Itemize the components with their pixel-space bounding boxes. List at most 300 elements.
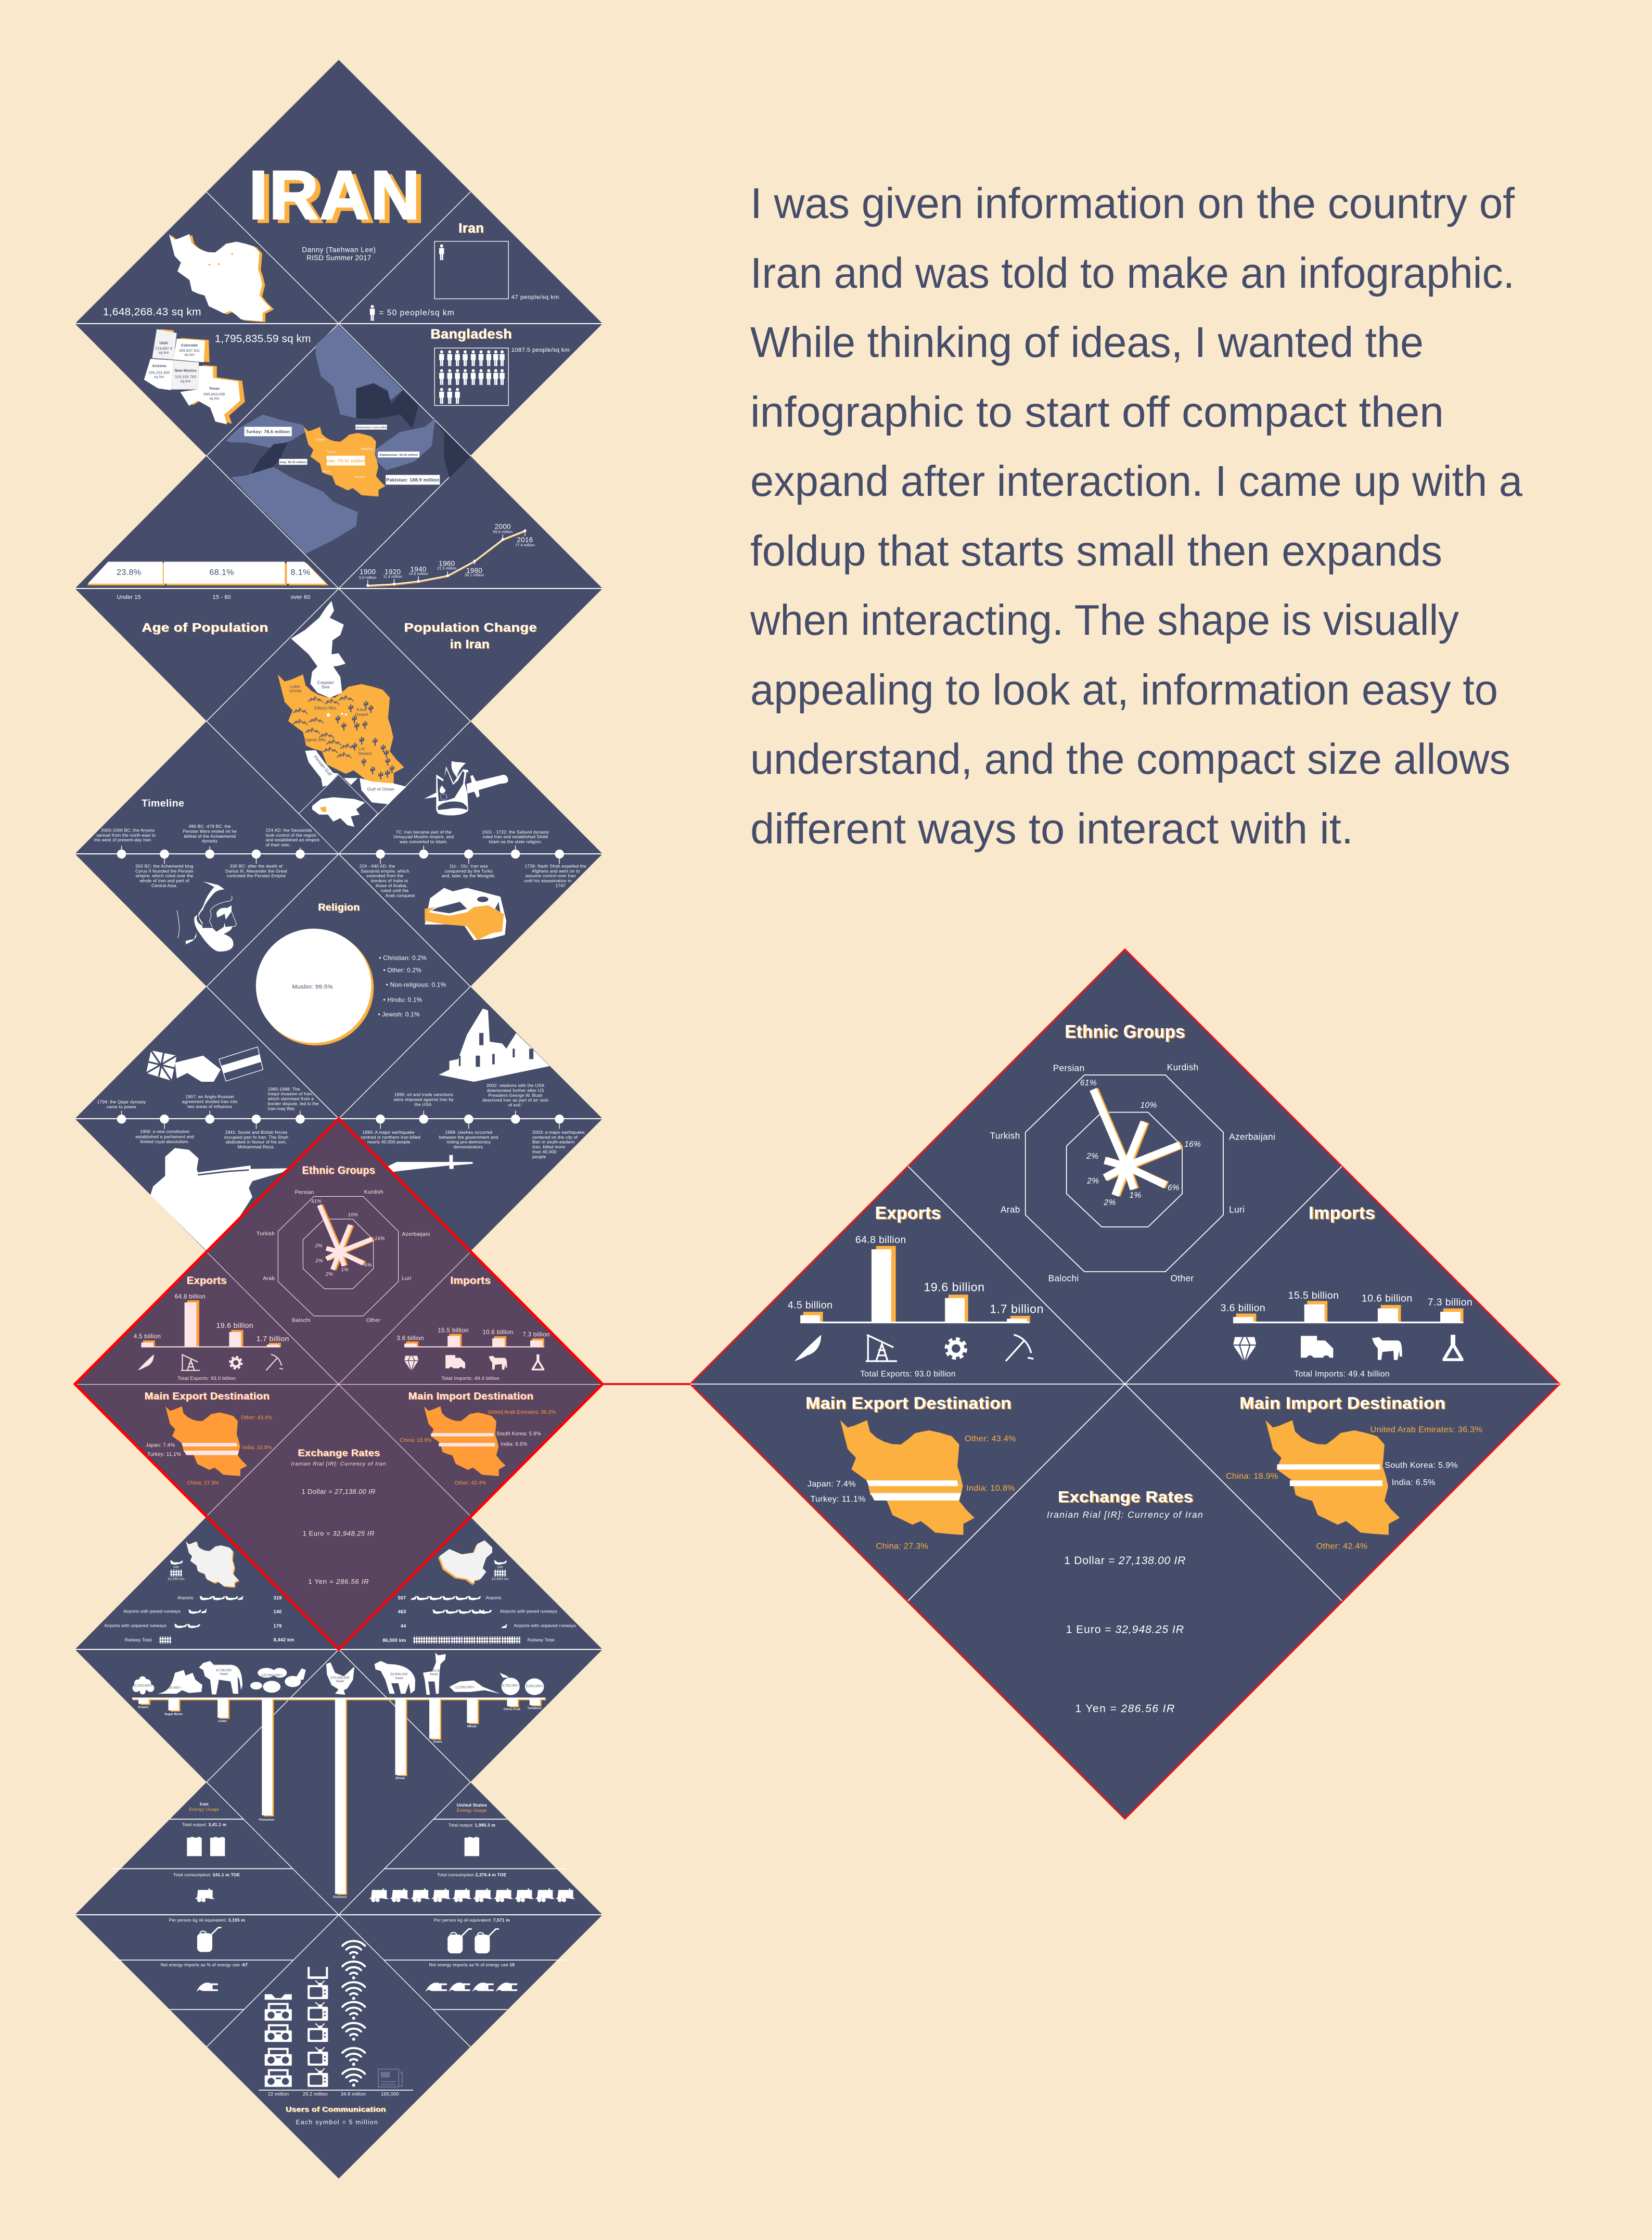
Iran energy usage: Net energy imports as % of energy use -67 xyxy=(161,1962,248,1967)
table: China airports and railways: 507 xyxy=(398,1595,406,1601)
table: China airports and railways: Airports with paved runways xyxy=(500,1609,557,1614)
chart: ethnic groups radar: Other xyxy=(366,1318,381,1324)
timeline text part one: conquered by the Turks xyxy=(445,868,493,874)
timeline text part two: centered on the city of xyxy=(532,1134,578,1140)
map: Iran infrastructure xyxy=(186,1541,240,1588)
timeline text part one: Persian Wars ended int he xyxy=(183,829,237,834)
map: export destinations enlarged: China: 27.3% xyxy=(876,1541,928,1551)
timeline text part one: Arab conquest xyxy=(386,893,415,898)
text block: project description: appealing to look at, information easy to xyxy=(750,665,1498,714)
chart: agriculture bars: Sugar Beets xyxy=(164,1713,183,1716)
chart: population change line: 1920 xyxy=(385,568,401,576)
map: export destinations enlarged: Other: 43.4% xyxy=(965,1434,1016,1443)
table: Iran airports and railways: Railway Total xyxy=(125,1637,152,1643)
heading: Main Export Destination: Main Export Destination xyxy=(145,1390,270,1402)
chart: ethnic groups radar enlarged: Luri xyxy=(1229,1205,1245,1214)
chart: exports bars enlarged: 1.7 billion xyxy=(990,1302,1044,1315)
timeline text part one: Islam as the state religion. xyxy=(489,839,542,844)
map: export destinations: Turkey: 11.1% xyxy=(147,1452,181,1457)
timeline text part one: 330 BC: after the death of xyxy=(230,864,283,868)
labels: crop and livestock volumes: 3,000,000 t xyxy=(526,1684,543,1688)
chart: ethnic groups radar: Luri xyxy=(402,1276,412,1282)
timeline text part two: Iran, killed more xyxy=(532,1144,565,1149)
heading: Ethnic Groups: Ethnic Groups xyxy=(302,1164,375,1176)
table: China airports and railways: Airports with unpaved runways xyxy=(514,1623,576,1628)
United States energy usage xyxy=(369,1802,575,1992)
map: US states comparison: sq km xyxy=(159,351,169,355)
icons: export categories xyxy=(138,1354,283,1371)
timeline text part two: Ban in south-eastern xyxy=(532,1140,575,1145)
foldup infographic: full strip xyxy=(75,60,603,2179)
map: Iran geography: Zagros Mts. xyxy=(303,737,327,742)
chart: religion pie xyxy=(256,929,374,1045)
timeline text part two: of evil.' xyxy=(508,1103,523,1108)
chart: ethnic groups radar: 6% xyxy=(364,1262,372,1268)
map: export destinations: Japan: 7.4% xyxy=(146,1443,175,1448)
timeline text part two: the USA. xyxy=(415,1102,433,1107)
map: Iran geography: Gulf of Oman xyxy=(367,786,394,791)
timeline text part one: 1501 - 1722: the Safavid dynasty xyxy=(482,829,549,835)
table: Iran airports and railways xyxy=(104,1595,294,1644)
labels: crop and livestock volumes: head xyxy=(220,1672,228,1676)
map: Iran and neighbours: Ardebil xyxy=(316,438,325,441)
map: import destinations: Other: 42.4% xyxy=(455,1480,486,1486)
labels: crop and livestock volumes: 3,732,000 t xyxy=(502,1684,519,1688)
heading: Ethnic Groups enlarged: Ethnic Groups xyxy=(1065,1021,1185,1042)
table: Iran airports and railways: 179 xyxy=(274,1623,281,1629)
table: China airports and railways: Railway Total xyxy=(528,1637,554,1643)
title: IRAN: IRAN xyxy=(254,160,426,237)
labels: crop and livestock volumes: 25,200,000 xyxy=(425,1669,443,1673)
exchange rates list: 1 Dollar = 27,138.00 IR xyxy=(302,1488,376,1495)
map: US states comparison: 315,193.783 xyxy=(175,375,196,379)
text block: project description: Iran and was told to make an infographic. xyxy=(750,249,1515,297)
table: Iran airports and railways: 140 xyxy=(274,1609,281,1614)
labels: crop and livestock volumes: head xyxy=(336,1680,344,1683)
heading: Main Import Destination: Main Import Destination xyxy=(408,1390,533,1402)
timeline text part one: the west of present-day Iran xyxy=(94,837,151,842)
map: import destinations: South Korea: 5.9% xyxy=(496,1431,541,1437)
chart: population change line: 1980 xyxy=(466,567,482,574)
chart: exports bars: 64.8 billion xyxy=(175,1294,206,1300)
map: import destinations enlarged xyxy=(1226,1420,1482,1551)
map: US states comparison: sq km xyxy=(154,375,164,379)
Iran energy usage: Total consumption: 241.1 m TOE xyxy=(173,1872,240,1877)
chart: population change line: 1900 xyxy=(360,568,376,576)
timeline text part two: were imposed against Iran by xyxy=(393,1097,454,1102)
icons: import categories xyxy=(404,1354,544,1371)
panel: energy usage and communication xyxy=(111,1801,575,2126)
map: import destinations enlarged: United Arab Emirates: 36.3% xyxy=(1370,1425,1482,1435)
timeline text part one: controled the Persian Empire xyxy=(227,873,286,878)
timeline text part two: 1941: Soviet and British forces xyxy=(225,1130,287,1135)
text block: project description: understand, and the compact size allows xyxy=(750,735,1510,783)
chart: ethnic groups radar enlarged xyxy=(990,1062,1275,1284)
map: Iran geography: Persian Gulf xyxy=(313,754,333,777)
table: Iran airports and railways: Airports xyxy=(177,1595,193,1601)
map: import destinations enlarged: Other: 42.4% xyxy=(1316,1541,1367,1551)
timeline text part one: and established an empire xyxy=(266,837,319,842)
map: export destinations: China: 27.3% xyxy=(187,1480,219,1486)
heading: Exchange Rates enlarged: Exchange Rates xyxy=(1058,1488,1193,1506)
timeline text part one: 224 - 640 AD: the xyxy=(360,864,395,868)
timeline text part two: 1980-1988: The xyxy=(268,1086,300,1092)
heading: Population Change in Iran: Population Change xyxy=(404,621,537,635)
timeline text part two: two areas of influence xyxy=(187,1104,232,1109)
chart: population change line: 77.4 million xyxy=(515,544,535,547)
heading: Imports: Imports xyxy=(450,1275,491,1287)
heading: Religion: Religion xyxy=(318,902,360,913)
note: symbol scale: Each symbol = 5 million xyxy=(296,2119,378,2126)
map: Iran geography xyxy=(278,601,406,804)
legend: person symbol xyxy=(370,305,454,321)
note: total exports enlarged: Total Exports: 93.0 billion xyxy=(860,1370,956,1379)
map: China infrastructure xyxy=(438,1540,492,1585)
chart: agriculture bars: Cattle xyxy=(218,1720,227,1723)
chart: agriculture bars: Wheat xyxy=(467,1725,477,1728)
timeline text part one: ruled until the xyxy=(381,888,409,893)
table: China airports and railways: 86,000 km xyxy=(382,1637,406,1643)
highlighted diamond: exports and imports section xyxy=(74,1119,603,1649)
timeline text part two: limited royal absolutism. xyxy=(140,1139,189,1144)
legend: Iran plane and rail units: 100 xyxy=(173,1566,179,1569)
title: IRAN: IRAN xyxy=(249,157,421,234)
timeline text part two: occupied part fo Iran. The Shah xyxy=(224,1134,288,1140)
chart: ethnic groups radar: 2% xyxy=(315,1243,323,1248)
density box: Bangladesh xyxy=(434,348,508,405)
heading: Users of Communication: Users of Communication xyxy=(286,2105,386,2113)
Iran energy usage: Total output: 3,41.1 m xyxy=(182,1822,226,1827)
chart: communication pictograms: 22 million xyxy=(268,2092,289,2097)
map: US states comparison: Texas xyxy=(209,387,220,391)
chart: ethnic groups radar enlarged: Persian xyxy=(1053,1063,1085,1073)
timeline text part one: Sassanid empire, which xyxy=(361,868,409,874)
table: China airports and railways: Airports xyxy=(485,1595,502,1601)
timeline text part one: 224 AD: the Sassanids xyxy=(266,828,312,833)
exchange rates list: 1 Euro = 32,948.25 IR xyxy=(303,1529,375,1537)
map: export destinations enlarged xyxy=(808,1420,1016,1551)
list: other religions: • Other: 0.2% xyxy=(383,967,421,974)
timeline text part one: Afghans and went on to xyxy=(532,868,580,874)
heading: Bangladesh: Bangladesh xyxy=(430,327,512,342)
labels: crop and livestock volumes: 12,500,000 t xyxy=(455,1685,475,1689)
chart: agriculture bars: Grapes xyxy=(138,1706,149,1709)
chart: exports bars: 19.6 billion xyxy=(216,1321,253,1329)
timeline text part two: President George W. Bush xyxy=(489,1093,543,1098)
map: Iran and neighbours: Kerman xyxy=(354,476,365,479)
chart: age of population bar xyxy=(87,562,329,585)
label: Iran area: 1,648,268.43 sq km xyxy=(103,306,201,318)
chart: ethnic groups radar enlarged: 2% xyxy=(1086,1152,1098,1161)
panel: timeline part two xyxy=(97,1008,586,1251)
table: China airports and railways: 44 xyxy=(401,1623,406,1629)
map: export destinations enlarged: Turkey: 11.1% xyxy=(810,1494,866,1504)
map: import destinations xyxy=(400,1406,556,1486)
timeline text part two: demonstrators. xyxy=(453,1144,484,1149)
density box: Iran xyxy=(434,241,508,299)
panel: strip silhouette xyxy=(75,60,603,2179)
timeline text part two: rioting pro-democracy xyxy=(446,1140,491,1145)
chart: ethnic groups radar enlarged: 6% xyxy=(1168,1184,1180,1193)
chart: ethnic groups radar: 16% xyxy=(375,1235,385,1241)
text block: project description: infographic to start off compact then xyxy=(750,388,1444,436)
legend: China plane and rail units xyxy=(492,1560,509,1581)
text block: project description: expand after interaction. I came up with a xyxy=(750,457,1523,505)
text block: project description: when interacting. The shape is visually xyxy=(750,596,1459,644)
heading: Imports enlarged: Imports xyxy=(1309,1204,1375,1223)
label: US states area: 1,795,835.59 sq km xyxy=(215,333,311,344)
map: US states comparison: 219,887.4 xyxy=(155,347,172,351)
chart: agriculture bars: Citrus Fruit xyxy=(504,1708,520,1711)
timeline text part two: which stemmed from a xyxy=(267,1096,314,1102)
panel: title and size comparison xyxy=(87,157,570,587)
labels: crop and livestock volumes: 8,738,000 xyxy=(216,1669,232,1672)
Iran energy usage: Per person kg oil equivalent: 3,155 m xyxy=(169,1917,245,1923)
timeline text part two: 1995: oil and trade sanctions xyxy=(394,1092,453,1097)
timeline text part one: Darius III, Alexander the Great xyxy=(225,868,287,874)
timeline text part one: ruled Iran and established Shiite xyxy=(483,834,548,839)
connector: highlight to enlarged view xyxy=(603,1383,691,1385)
map: import destinations: United Arab Emirates: 36.3% xyxy=(488,1410,556,1415)
chart: population change line: 39.1 million xyxy=(465,574,484,578)
chart: imports bars enlarged: 3.6 billion xyxy=(1221,1302,1265,1314)
heading: Exports enlarged: Exports xyxy=(875,1204,941,1223)
author credit xyxy=(302,246,376,262)
icon: crown and sword xyxy=(424,761,508,815)
map: Iran and neighbours: Mashhad xyxy=(361,447,373,451)
timeline text part two: 1999: clashes occurred xyxy=(445,1130,492,1135)
legend: Iran plane and rail units xyxy=(168,1560,185,1581)
Iran energy usage: Energy Usage xyxy=(189,1807,219,1812)
chart: ethnic groups radar: Azerbaijani xyxy=(402,1232,430,1237)
exchange rates list enlarged: 1 Dollar = 27,138.00 IR xyxy=(1064,1555,1186,1567)
chart: population change line: 9.9 million xyxy=(359,576,376,580)
map: US states comparison xyxy=(144,329,245,425)
enlarged diamond: exports and imports section xyxy=(690,950,1559,1819)
chart: communication pictograms: 29.2 million xyxy=(303,2092,328,2097)
heading: Main Import Destination enlarged: Main Import Destination xyxy=(1239,1394,1445,1412)
icon: rifle xyxy=(386,1155,473,1172)
label: Bangladesh density: 1087.5 people/sq km xyxy=(511,347,570,353)
subtitle: currency enlarged: Iranian Rial [IR]: Currency of Iran xyxy=(1047,1509,1203,1520)
chart: exports bars: 4.5 billion xyxy=(134,1333,161,1340)
timeline text part one: Umayyad Muslim empire, and xyxy=(393,834,454,839)
chart: agriculture bars: Pistachios xyxy=(259,1819,275,1822)
timeline text part two: Iran-Iraq War. xyxy=(268,1106,296,1111)
map: Iran and neighbours: Tehran xyxy=(327,451,336,454)
chart: imports bars: 15.5 billion xyxy=(438,1327,469,1334)
text block: project description xyxy=(750,179,1523,853)
timeline axis one xyxy=(117,846,564,864)
chart: imports bars enlarged: 10.6 billion xyxy=(1362,1292,1413,1304)
map: Iran and neighbours: Afghanistan: 32.53 million xyxy=(379,454,418,457)
labels: crop and livestock volumes: head xyxy=(430,1673,438,1676)
map: import destinations enlarged: South Korea: 5.9% xyxy=(1385,1461,1458,1470)
chart: ethnic groups radar enlarged: 10% xyxy=(1141,1101,1157,1110)
inset map: Asia xyxy=(299,775,378,854)
icons: crops and livestock xyxy=(133,1653,544,1695)
timeline text part two: agreement divided Iran into xyxy=(182,1099,238,1104)
table: China airports and railways: 463 xyxy=(398,1609,406,1614)
timeline text part one: 550 BC: the Achemenid king xyxy=(136,864,194,868)
timeline text part one: 2000-1000 BC: the Aryans xyxy=(101,828,155,833)
text block: project description: foldup that starts small then expands xyxy=(750,527,1442,575)
table: Iran airports and railways: Airports with paved runways xyxy=(123,1609,181,1614)
map: Iran geography: Desert xyxy=(358,751,372,756)
map: export destinations xyxy=(146,1406,273,1486)
chart: agriculture bars xyxy=(132,1697,546,1899)
timeline text part two: deteriorated further after US xyxy=(487,1088,544,1093)
chart: population change line: 21.5 million xyxy=(437,567,457,570)
timeline text part two: border dispute, led to the xyxy=(268,1101,319,1106)
heading: Population Change in Iran xyxy=(404,621,537,651)
Iran energy usage xyxy=(161,1801,248,1992)
age labels: 15 - 60 xyxy=(213,594,231,600)
chart: ethnic groups radar: Turkish xyxy=(257,1231,275,1237)
heading: Main Export Destination enlarged: Main Export Destination xyxy=(805,1394,1011,1412)
chart: exports bars enlarged xyxy=(788,1234,1044,1323)
table: Iran airports and railways: Airports with unpaved runways xyxy=(104,1623,167,1628)
labels: crop and livestock volumes: 5,250,000 t xyxy=(164,1686,181,1690)
timeline text part one: defeat of the Achaemenid xyxy=(184,834,236,839)
map: Iran geography: Elburz Mts. xyxy=(314,705,337,710)
map: Iran geography: Sea xyxy=(322,684,330,689)
timeline text part one: Cyrus II founded the Persian xyxy=(135,868,194,874)
timeline text part two: Mohammad Reza. xyxy=(238,1144,275,1149)
timeline text part one: spread from the north-east to xyxy=(96,833,156,838)
highlight outline xyxy=(75,1119,603,1649)
timeline text part one: of their own. xyxy=(266,842,291,848)
map: import destinations enlarged: India: 6.5% xyxy=(1392,1478,1436,1487)
timeline text part one: those of Arabia, xyxy=(376,883,407,888)
panel: age, geography, timeline part one, religion xyxy=(94,594,586,1045)
timeline text part one: took control of the region xyxy=(266,833,316,838)
heading: Population Change in Iran: in Iran xyxy=(450,637,490,651)
United States energy usage: Total output: 1,980.3 m xyxy=(449,1822,495,1827)
timeline text part two: 1794: the Qajar dynasty xyxy=(97,1099,146,1105)
heading: Iran density: Iran xyxy=(458,221,484,236)
map: import destinations: China: 18.9% xyxy=(400,1438,432,1443)
map: US states comparison: Arizona xyxy=(152,365,166,368)
timeline text part one: 490 BC -479 BC: the xyxy=(189,824,231,829)
list: other religions: • Non-religious: 0.1% xyxy=(386,982,446,989)
chart: exports bars enlarged: 19.6 billion xyxy=(924,1281,985,1294)
timeline text part two: 1990: A major earthquake xyxy=(363,1130,415,1135)
chart: ethnic groups radar enlarged: Other xyxy=(1171,1273,1194,1284)
chart: exports bars xyxy=(134,1294,289,1348)
timeline text part one: Central Asia. xyxy=(151,883,177,888)
note: total imports enlarged: Total Imports: 49.4 billion xyxy=(1294,1370,1390,1379)
map: US states comparison: 295,253.465 xyxy=(148,371,170,375)
labels: crop and livestock volumes: 12,520,000 t xyxy=(133,1684,152,1688)
legend: China plane and rail units: 100 xyxy=(497,1566,503,1569)
heading: Exchange Rates: Exchange Rates xyxy=(298,1448,380,1458)
map: import destinations enlarged: China: 18.9% xyxy=(1226,1471,1278,1481)
chart: ethnic groups radar: 2% xyxy=(325,1271,333,1276)
map: Iran geography: Lut xyxy=(358,746,365,751)
map: US states comparison: 269,837.911 xyxy=(179,349,200,353)
timeline text part two: nearly 40,000 people. xyxy=(367,1140,412,1145)
chart: religion pie: Muslim: 99.5% xyxy=(292,984,333,990)
map: Iran and neighbours: Iran: 79.11 million xyxy=(326,458,366,464)
chart: ethnic groups radar enlarged: Turkish xyxy=(990,1130,1020,1141)
labels: crop and livestock volumes xyxy=(133,1669,543,1690)
chart: population change line: 14.6 million xyxy=(408,572,428,576)
timeline text part two: between the government and xyxy=(439,1134,498,1140)
chart: ethnic groups radar enlarged: Kurdish xyxy=(1167,1062,1199,1072)
text block: project description: While thinking of ideas, I wanted the xyxy=(750,318,1424,366)
legend: person symbol: = 50 people/sq km xyxy=(379,309,454,317)
text block: project description: different ways to interact with it. xyxy=(750,804,1353,853)
table: China airports and railways xyxy=(382,1595,576,1644)
list: other religions: • Jewish: 0.1% xyxy=(378,1012,420,1018)
timeline text part two: descrived Iran as part of an 'axis xyxy=(482,1097,548,1103)
chart: imports bars xyxy=(396,1327,550,1348)
exchange rates list enlarged: 1 Yen = 286.56 IR xyxy=(1075,1703,1175,1714)
chart: imports bars enlarged: 15.5 billion xyxy=(1288,1290,1339,1301)
timeline text part one: was converted to Islam. xyxy=(399,839,448,844)
United States energy usage: Net energy imports as % of energy use 15 xyxy=(429,1962,515,1967)
chart: population change line xyxy=(359,523,535,587)
text block: project description: I was given information on the country of xyxy=(750,179,1515,227)
chart: imports bars: 10.6 billion xyxy=(482,1329,514,1336)
table: Iran airports and railways: 319 xyxy=(274,1595,281,1601)
icons: export categories enlarged xyxy=(795,1335,1033,1361)
timeline text part two: 1907: an Anglo-Russian xyxy=(186,1094,234,1099)
United States energy usage: Energy Usage xyxy=(457,1808,487,1813)
age labels: Under 15 xyxy=(117,594,141,600)
timeline text part one: 7C: Iran became part of the xyxy=(396,829,452,835)
chart: communication pictograms xyxy=(259,1941,413,2097)
United States energy usage: Total consumption 2,376.4 m TOE xyxy=(437,1872,507,1877)
chart: imports bars: 7.3 billion xyxy=(522,1332,550,1338)
timeline text part two: Iraqui invasion of Iran, xyxy=(268,1091,313,1096)
chart: ethnic groups radar enlarged: Arab xyxy=(1001,1205,1020,1214)
timeline text part one: dynasty xyxy=(202,838,218,843)
map: US states comparison: Utah xyxy=(160,341,168,345)
chart: communication pictograms: 165,000 xyxy=(381,2092,399,2097)
chart: ethnic groups radar: 10% xyxy=(348,1212,358,1218)
map: US states comparison: sq km xyxy=(184,353,195,357)
legend: China plane and rail units: 10,000 km xyxy=(492,1578,509,1581)
list: other religions xyxy=(378,955,446,1018)
note: total exports: Total Exports: 93.0 billion xyxy=(177,1375,236,1381)
chart: agriculture bars: Goats xyxy=(433,1740,442,1744)
chart: population change line: 2016 xyxy=(517,536,533,544)
chart: age of population bar: 23.8% xyxy=(117,568,142,577)
United States energy usage: United States xyxy=(457,1802,487,1808)
chart: ethnic groups radar enlarged: Balochi xyxy=(1048,1273,1079,1284)
chart: ethnic groups radar enlarged: Azerbaijani xyxy=(1229,1132,1275,1142)
map: export destinations enlarged: India: 10.8% xyxy=(966,1483,1015,1493)
labels: crop and livestock volumes: 53,900,000 xyxy=(390,1673,408,1676)
author credit: Danny (Taehwan Lee) xyxy=(302,246,376,254)
chart: agriculture bars: Tomatoes xyxy=(527,1707,542,1710)
map: US states comparison: 695,663.036 xyxy=(204,393,225,396)
chart: population change line: 65.6 million xyxy=(493,531,513,534)
chart: ethnic groups radar: Balochi xyxy=(292,1318,311,1324)
label: Iran density: 47 people/sq km xyxy=(511,294,559,300)
chart: population change line: 11.4 million xyxy=(383,575,402,579)
timeline text part two: established a parliament and xyxy=(135,1134,194,1140)
chart: ethnic groups radar: 1% xyxy=(341,1266,349,1272)
map: export destinations: India: 10.8% xyxy=(242,1445,272,1451)
map: Iran area xyxy=(169,234,274,322)
timeline text part two: 1906: a new constitution xyxy=(140,1129,189,1134)
map: Iran geography: Kavir xyxy=(356,707,367,712)
timeline text part two: abdicated in favour of his son, xyxy=(226,1140,287,1145)
icon: handshake and flags xyxy=(146,1047,263,1082)
